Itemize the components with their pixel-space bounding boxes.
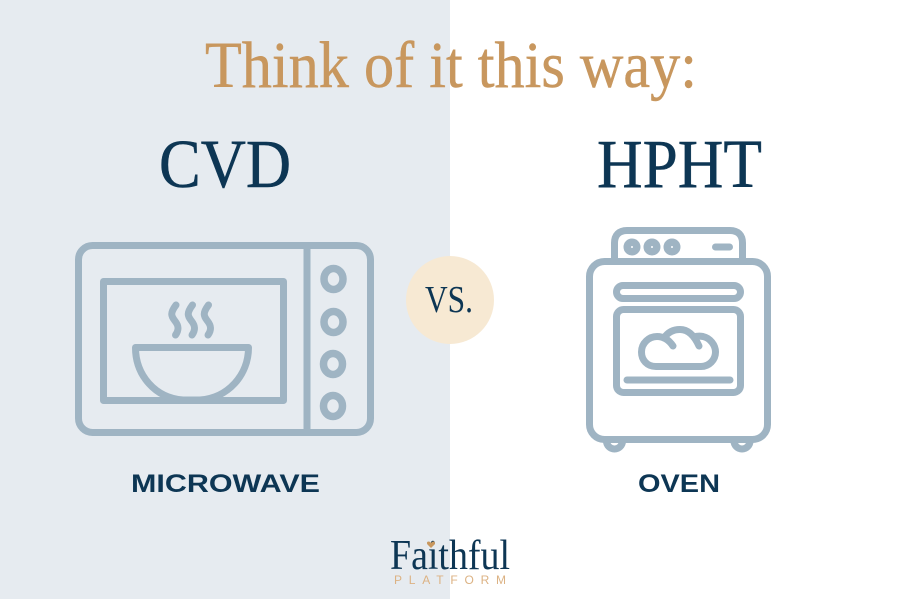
logo: Faithful Platform: Faithful (390, 533, 510, 579)
icon: oven (590, 230, 768, 449)
heading: HPHT: HPHT (597, 126, 762, 202)
label: oven: OVEN (638, 470, 720, 498)
callout: vs. badge (406, 256, 494, 344)
icon: microwave (78, 246, 370, 432)
logo: Faithful Platform: PLATFORM (394, 573, 513, 587)
title: Think of it this way: (205, 29, 697, 102)
label: microwave: MICROWAVE (131, 470, 320, 498)
heading: CVD: CVD (159, 126, 291, 202)
panel: left background (0, 0, 450, 599)
callout: vs. badge: VS. (425, 279, 473, 321)
